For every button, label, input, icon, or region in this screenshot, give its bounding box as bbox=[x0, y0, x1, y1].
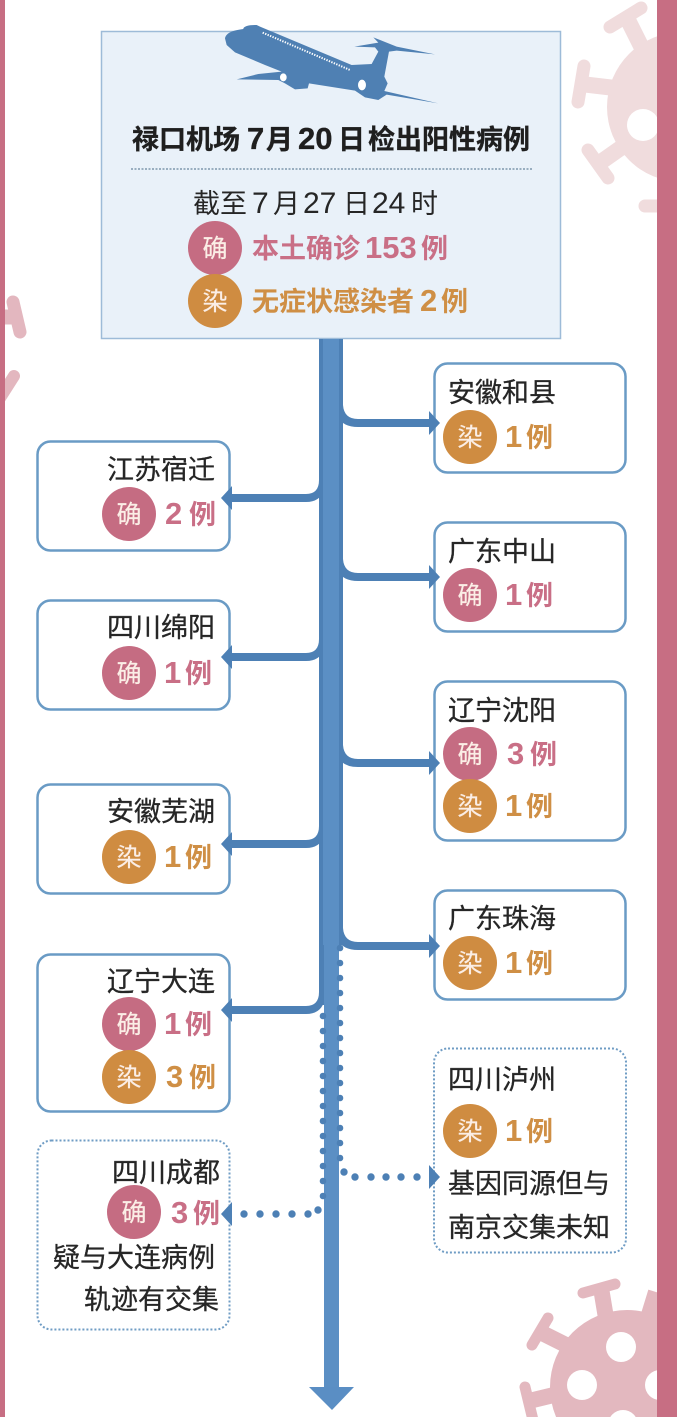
panel: 广东中山: 确 bbox=[457, 582, 483, 610]
arrow: to 辽宁大连 bbox=[221, 992, 324, 1022]
arrow: to 安徽芜湖 bbox=[221, 826, 324, 856]
confirmed total: 本土确诊 bbox=[252, 234, 361, 264]
panel: 辽宁大连: 例 bbox=[189, 1063, 216, 1093]
arrow: to 广东中山 bbox=[338, 559, 440, 589]
panel: 安徽芜湖: 染 bbox=[116, 844, 142, 872]
panel: 辽宁沈阳: 1 bbox=[505, 788, 522, 823]
heading: 检出阳性病例 bbox=[368, 125, 530, 155]
dotted arrow: to 四川成都 bbox=[221, 1202, 322, 1226]
panel: 广东中山: 1 bbox=[505, 577, 522, 612]
panel: 辽宁大连: 确 bbox=[116, 1011, 142, 1039]
panel: 四川绵阳 bbox=[38, 600, 230, 710]
panel: 四川成都: 例 bbox=[193, 1199, 220, 1229]
panel: 辽宁沈阳: 染 bbox=[457, 793, 483, 821]
panel: 辽宁大连: 3 bbox=[166, 1059, 183, 1094]
arrow: to 安徽和县 bbox=[338, 405, 440, 435]
panel: 江苏宿迁: 例 bbox=[189, 500, 216, 530]
panel: 四川泸州: 四川泸州 bbox=[448, 1065, 556, 1095]
heading: 20 bbox=[298, 121, 332, 156]
asymptomatic total: 例 bbox=[441, 287, 468, 317]
panel: 四川成都: 确 bbox=[121, 1199, 147, 1227]
panel: 四川泸州: 1 bbox=[505, 1113, 522, 1148]
asymptomatic total: 染 bbox=[202, 288, 228, 316]
panel: 安徽芜湖: 例 bbox=[185, 843, 212, 873]
panel: 四川泸州: 南京交集未知 bbox=[448, 1213, 610, 1243]
confirmed total: 153 bbox=[365, 230, 417, 265]
panel: 广东中山: 广东中山 bbox=[448, 537, 556, 567]
panel: 四川绵阳: 1 bbox=[164, 655, 181, 690]
heading: 月 bbox=[266, 125, 293, 155]
panel: 安徽芜湖: 1 bbox=[164, 839, 181, 874]
panel: 辽宁大连: 1 bbox=[164, 1006, 181, 1041]
icon: virus top right bbox=[578, 8, 677, 206]
date line: 7 bbox=[252, 187, 269, 220]
panel: header box bbox=[102, 25, 560, 339]
panel: 安徽和县: 1 bbox=[505, 419, 522, 454]
arrow: to 广东珠海 bbox=[338, 928, 440, 958]
panel: 安徽芜湖 bbox=[38, 784, 230, 894]
icon: virus bottom right bbox=[525, 1284, 677, 1417]
panel: 辽宁大连: 辽宁大连 bbox=[107, 967, 215, 997]
heading: 禄口机场 bbox=[132, 125, 240, 155]
panel: 广东中山 bbox=[434, 522, 626, 632]
panel: 江苏宿迁: 2 bbox=[165, 496, 182, 531]
panel: 辽宁沈阳: 3 bbox=[507, 736, 524, 771]
panel: 江苏宿迁: 江苏宿迁 bbox=[107, 455, 215, 485]
panel: 江苏宿迁 bbox=[38, 442, 230, 550]
arrow: to 四川绵阳 bbox=[221, 639, 324, 669]
date line: 日 bbox=[343, 189, 370, 219]
panel: 四川成都: 3 bbox=[171, 1195, 188, 1230]
panel: 四川泸州: 例 bbox=[526, 1117, 553, 1147]
panel: 广东珠海: 染 bbox=[457, 950, 483, 978]
panel: 安徽和县: 例 bbox=[526, 423, 553, 453]
date line: 27 bbox=[303, 187, 336, 220]
panel: 安徽和县 bbox=[434, 364, 626, 472]
panel: 四川成都 bbox=[38, 1140, 230, 1330]
confirmed total bbox=[188, 221, 448, 275]
confirmed total: 例 bbox=[421, 234, 448, 264]
panel: 广东珠海 bbox=[434, 890, 626, 1000]
panel: 四川成都: 四川成都 bbox=[112, 1158, 220, 1188]
arrow: to 辽宁沈阳 bbox=[338, 745, 440, 775]
panel: 四川成都: 疑与大连病例 bbox=[53, 1243, 215, 1273]
dotted arrow: to 四川泸州 bbox=[340, 1165, 440, 1189]
panel: 辽宁大连 bbox=[38, 954, 230, 1112]
panel: 四川泸州: 基因同源但与 bbox=[448, 1169, 610, 1199]
panel: 辽宁沈阳: 确 bbox=[457, 741, 483, 769]
panel: 安徽和县: 染 bbox=[457, 424, 483, 452]
panel: 广东中山: 例 bbox=[526, 581, 553, 611]
date line: 截至 bbox=[193, 189, 247, 219]
panel: 四川绵阳: 四川绵阳 bbox=[107, 613, 215, 643]
panel: 辽宁沈阳 bbox=[434, 682, 626, 840]
panel: 江苏宿迁: 确 bbox=[116, 501, 142, 529]
right border strip bbox=[657, 0, 677, 1417]
panel: 安徽和县: 安徽和县 bbox=[448, 378, 556, 408]
timeline trunk with arrow bbox=[309, 339, 354, 1410]
date line: 月 bbox=[273, 189, 300, 219]
panel: 四川绵阳: 例 bbox=[185, 659, 212, 689]
panel: 辽宁大连: 染 bbox=[116, 1064, 142, 1092]
panel: 四川泸州: 染 bbox=[457, 1118, 483, 1146]
arrow: to 江苏宿迁 bbox=[221, 480, 324, 510]
left border strip bbox=[0, 0, 5, 1417]
panel: 广东珠海: 例 bbox=[526, 949, 553, 979]
asymptomatic total: 无症状感染者 bbox=[252, 286, 414, 317]
panel: 广东珠海: 广东珠海 bbox=[448, 904, 556, 934]
panel: 辽宁沈阳: 例 bbox=[530, 740, 557, 770]
panel: 四川泸州 bbox=[434, 1048, 626, 1252]
icon: virus left edge bbox=[0, 302, 20, 398]
date line: 24 bbox=[372, 187, 405, 220]
panel: 辽宁沈阳: 例 bbox=[526, 792, 553, 822]
panel: 安徽芜湖: 安徽芜湖 bbox=[107, 797, 215, 827]
heading: 7 bbox=[247, 121, 264, 156]
panel: 广东珠海: 1 bbox=[505, 945, 522, 980]
icon: airplane bbox=[225, 25, 438, 103]
panel: 四川成都: 轨迹有交集 bbox=[84, 1285, 219, 1315]
date line: 时 bbox=[411, 189, 438, 219]
panel: 辽宁大连: 例 bbox=[185, 1010, 212, 1040]
confirmed total: 确 bbox=[202, 235, 228, 263]
panel: 四川绵阳: 确 bbox=[116, 660, 142, 688]
heading: 日 bbox=[338, 125, 365, 155]
asymptomatic total bbox=[188, 274, 468, 328]
panel: 辽宁沈阳: 辽宁沈阳 bbox=[448, 696, 556, 726]
asymptomatic total: 2 bbox=[420, 283, 437, 318]
